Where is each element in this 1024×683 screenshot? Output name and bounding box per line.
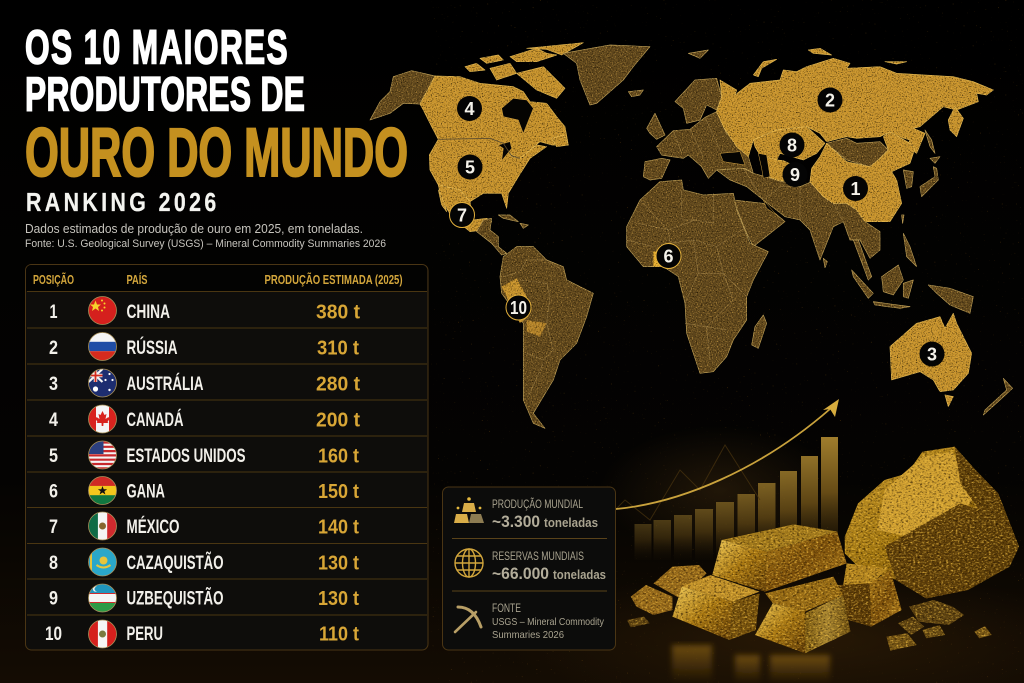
row 10 Peru [45,620,359,648]
row 7 Mexico: 7 [49,517,58,538]
subtitle [25,222,386,250]
row 8 Kazakhstan: CAZAQUISTÃO [126,552,224,574]
row 9 Uzbekistan: 130 t [318,588,359,610]
icon: gold bars [454,497,484,523]
row 9 Uzbekistan: UZBEQUISTÃO [126,588,224,610]
row 5 USA: 160 t [318,446,359,468]
source note: USGS – Mineral Commodity [492,616,605,628]
flag Ghana [88,476,116,505]
floor reflections [672,645,830,683]
source note: FONTE [492,603,521,615]
marker 1: 1 [850,179,861,199]
row 8 Kazakhstan: 130 t [318,552,359,574]
center bar [755,577,850,653]
row 9 Uzbekistan: 9 [49,588,58,610]
source note [455,603,605,641]
marker 8 [780,132,804,158]
stat: world production: toneladas [544,515,598,530]
row 8 Kazakhstan: 8 [49,553,58,574]
map markers [450,88,944,366]
row 1 China: CHINA [126,302,170,323]
row 5 USA: ESTADOS UNIDOS [126,446,246,467]
stat: world reserves: RESERVAS MUNDIAIS [492,551,584,563]
row 3 Australia: AUSTRÁLIA [126,373,204,395]
row 4 Canada: 4 [49,410,58,431]
row 3 Australia: 3 [49,374,58,395]
marker 5 [458,154,482,180]
table header [33,272,402,287]
row 9 Uzbekistan [49,584,359,612]
row 2 Russia: RÚSSIA [126,337,178,359]
marker 8: 8 [787,136,797,156]
marker 2: 2 [825,90,835,110]
source note: Summaries 2026 [492,629,564,641]
flag Uzbekistan [88,584,116,612]
flag Canada [88,405,116,433]
row 10 Peru: PERU [126,624,163,645]
row 1 China: 1 [50,302,58,323]
marker 4 [457,96,482,121]
row 2 Russia: 2 [49,338,58,359]
table header: POSIÇÃO [33,272,74,287]
growth arrow [616,399,839,509]
flag China [88,296,116,324]
marker 6: 6 [663,246,674,266]
title: PRODUTORES DE [25,67,305,121]
top bar [712,524,847,592]
row 4 Canada: 200 t [316,410,360,432]
title: OS 10 MAIORES [25,20,288,74]
marker 3: 3 [927,344,937,364]
flag Kazakhstan [88,548,116,576]
bar chart [600,437,838,560]
row 5 USA [49,441,359,469]
row 6 Ghana [49,476,359,505]
stat: world reserves [455,549,606,583]
americas [370,43,650,428]
table header: PRODUÇÃO ESTIMADA (2025) [264,272,402,287]
row 3 Australia [49,369,360,397]
flag Peru [88,620,117,648]
row 1 China [50,296,360,324]
gold bars and nuggets [627,447,1019,653]
marker 7 [450,202,474,228]
left bar [672,575,760,640]
row 1 China: 380 t [316,302,360,324]
world map [370,43,1013,428]
flag Australia [88,369,116,397]
row 2 Russia [49,332,359,361]
row 8 Kazakhstan [49,548,359,576]
marker 10 [506,295,531,320]
marker 3 [920,342,944,366]
subtitle: Dados estimados de produção de ouro em 2025, em toneladas. [25,222,363,236]
table header: PAÍS [126,272,148,287]
title [25,20,408,218]
row 5 USA: 5 [49,446,58,467]
stat: world reserves: ~66.000 [492,564,549,583]
row 2 Russia: 310 t [317,338,359,360]
flag USA [88,441,116,469]
marker 10: 10 [510,298,527,318]
row 7 Mexico: 140 t [318,516,359,538]
marker 9 [782,162,808,187]
subtitle: Fonte: U.S. Geological Survey (USGS) – Mineral Commodity Summaries 2026 [25,238,386,250]
icon: pickaxe [455,607,481,632]
row 6 Ghana: 6 [49,482,58,502]
icon: globe [455,549,483,577]
stat: world production [454,497,598,531]
flag Mexico [88,512,117,540]
row 3 Australia: 280 t [316,374,360,396]
marker 9: 9 [790,165,800,185]
row 4 Canada: CANADÁ [126,409,184,431]
stat: world reserves: toneladas [553,567,606,582]
info panel [442,487,616,650]
ranking table [26,264,428,650]
row 10 Peru: 110 t [319,624,359,646]
title: OURO DO MUNDO [25,115,408,192]
water bodies [438,98,777,215]
big nugget [845,447,1019,598]
row 4 Canada [49,405,360,433]
row 7 Mexico: MÉXICO [126,516,180,538]
small nuggets [627,565,992,651]
title: RANKING 2026 [26,188,216,218]
marker 1 [843,176,868,201]
marker 4: 4 [464,99,475,119]
back right bar [809,563,902,627]
stat: world production: ~3.300 [492,512,540,531]
marker 2 [818,88,842,112]
marker 5: 5 [465,158,475,178]
marker 7: 7 [457,206,467,226]
stat: world production: PRODUÇÃO MUNDIAL [492,498,583,511]
flag Russia [88,332,116,361]
row 7 Mexico [49,512,359,540]
row 6 Ghana: 150 t [318,481,359,503]
row 6 Ghana: GANA [126,482,165,502]
marker 6 [656,244,681,268]
row 10 Peru: 10 [45,624,62,645]
eurasia africa oceania [627,48,1013,415]
